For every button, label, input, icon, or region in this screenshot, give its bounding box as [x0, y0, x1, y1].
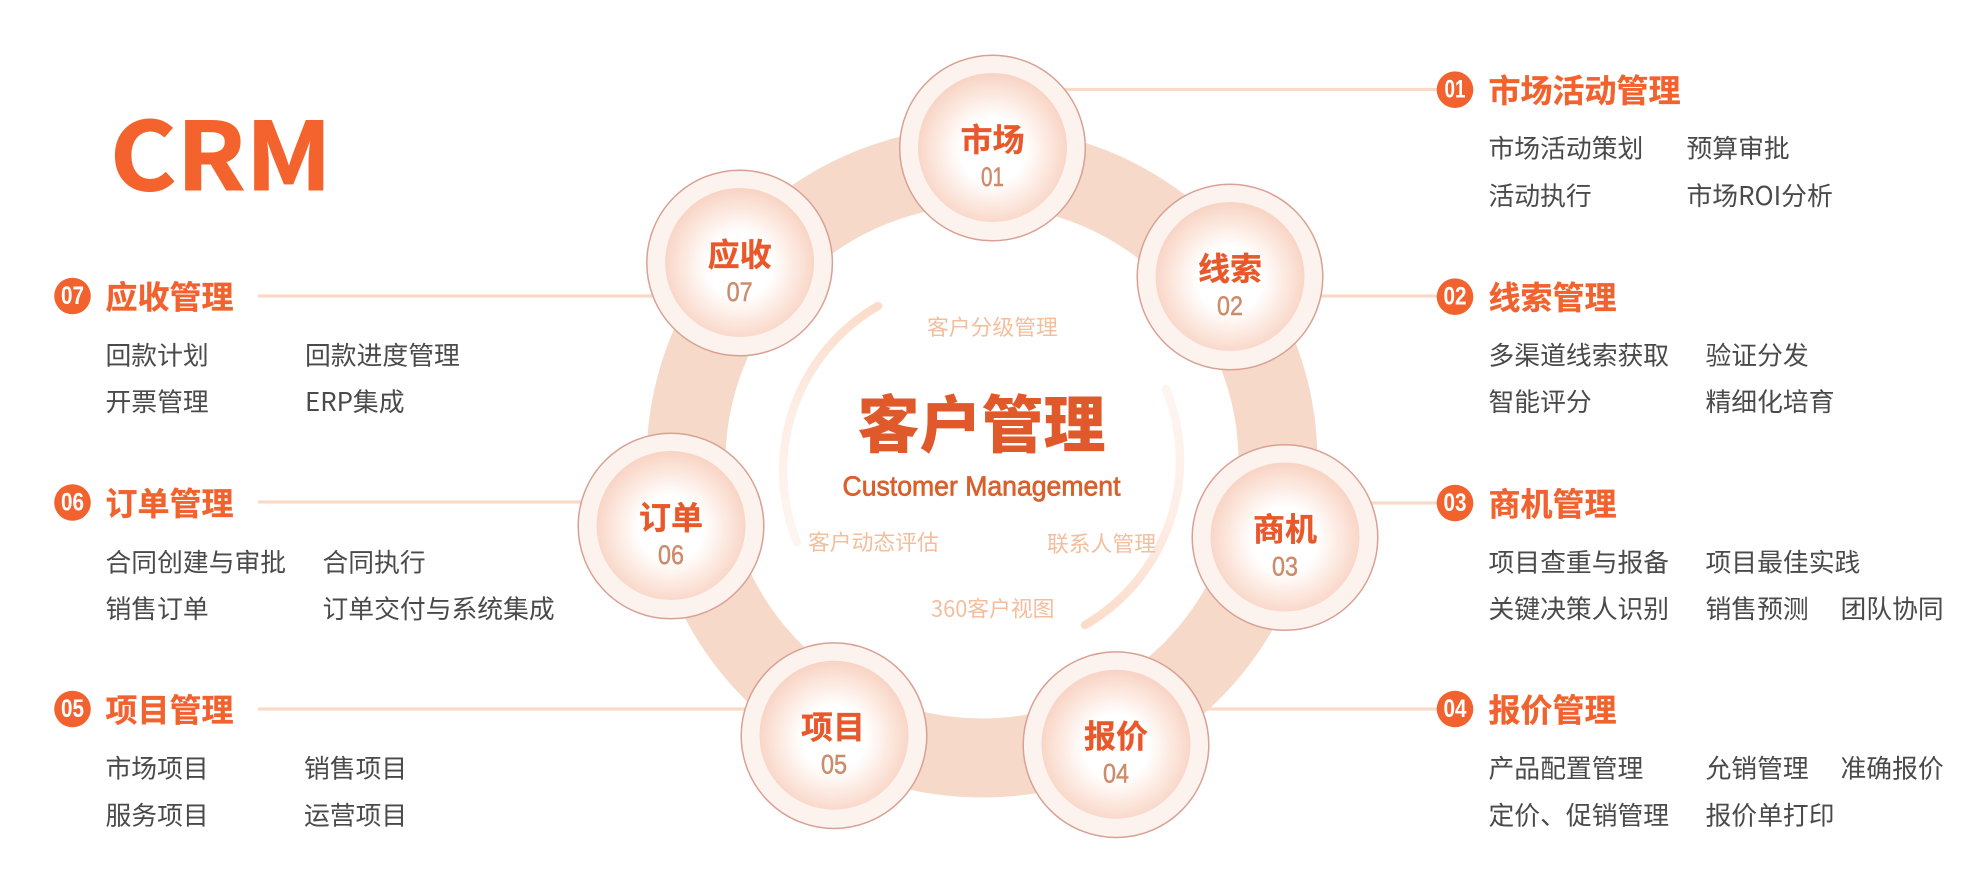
- node 05: 05: [821, 750, 847, 780]
- center hub: [808, 311, 1156, 624]
- inner arc: left: [783, 306, 878, 542]
- panel 05: project management: 运营项目: [304, 796, 407, 833]
- panel 04: quotation management: [1437, 686, 1944, 833]
- panel 06: order management: 合同执行: [322, 543, 426, 580]
- panel 02: leads management: 智能评分: [1488, 382, 1592, 419]
- panel 03: opportunity management: 团队协同: [1840, 589, 1944, 626]
- panel 02: leads management: 验证分发: [1706, 336, 1809, 373]
- node 04: 04: [1103, 759, 1129, 789]
- node 02: [1137, 184, 1323, 370]
- node 01: [900, 55, 1085, 241]
- node 02: 02: [1217, 291, 1243, 321]
- panel 01: market activity management: 预算审批: [1686, 129, 1790, 166]
- panel 05: project management: 服务项目: [106, 796, 209, 833]
- node 01: 市场: [960, 115, 1025, 161]
- label: 360 view: 360客户视图: [931, 592, 1054, 624]
- panel 02: leads management: 线索管理: [1488, 273, 1617, 319]
- panel 01: market activity management: 市场ROI分析: [1686, 176, 1833, 213]
- label: tiered management: 客户分级管理: [927, 311, 1058, 342]
- panel 05: project management: 项目管理: [106, 686, 234, 732]
- panel 01: market activity management: [1437, 66, 1833, 213]
- node 05: 项目: [801, 703, 865, 749]
- panel 07: receivables management: 回款进度管理: [305, 336, 460, 373]
- panel 01: market activity management: 01: [1444, 76, 1466, 104]
- panel 02: leads management: 多渠道线索获取: [1488, 336, 1669, 373]
- label: contacts: 联系人管理: [1047, 528, 1156, 558]
- inner arc: right: [1085, 389, 1180, 625]
- panel 04: quotation management: 04: [1444, 695, 1467, 723]
- panel 03: opportunity management: 商机管理: [1488, 480, 1617, 526]
- main ring: [686, 166, 1278, 758]
- node 07: 应收: [708, 230, 772, 276]
- panel 06: order management: [54, 479, 555, 626]
- center subtitle: Customer Management: [842, 470, 1121, 502]
- panel 03: opportunity management: 销售预测: [1706, 589, 1809, 626]
- panel 05: project management: 市场项目: [106, 749, 209, 786]
- panel 04: quotation management: 报价管理: [1488, 686, 1617, 732]
- panel 07: receivables management: ERP集成: [305, 382, 404, 419]
- node 06: [578, 433, 764, 619]
- panel 04: quotation management: 准确报价: [1840, 749, 1944, 786]
- panel 06: order management: 06: [61, 488, 84, 516]
- panel 01: market activity management: 活动执行: [1488, 176, 1592, 213]
- panel 06: order management: 销售订单: [106, 589, 209, 626]
- panel 05: project management: 05: [61, 695, 84, 723]
- panel 04: quotation management: 产品配置管理: [1488, 749, 1643, 786]
- panel 07: receivables management: 07: [61, 282, 84, 310]
- panel 01: market activity management: 市场活动管理: [1488, 66, 1681, 112]
- panel 07: receivables management: 应收管理: [106, 272, 234, 318]
- panel 04: quotation management: 允销管理: [1706, 749, 1809, 786]
- node 03: 商机: [1253, 504, 1317, 550]
- panel 07: receivables management: 开票管理: [106, 382, 209, 419]
- node 07: [647, 170, 832, 356]
- panel 03: opportunity management: 关键决策人识别: [1488, 589, 1669, 626]
- panel 06: order management: 订单管理: [106, 479, 234, 525]
- panel 03: opportunity management: 项目查重与报备: [1488, 543, 1669, 580]
- panel 02: leads management: 精细化培育: [1706, 382, 1834, 419]
- panel 05: project management: [54, 686, 407, 833]
- node 04: 报价: [1084, 712, 1148, 758]
- panel 03: opportunity management: 03: [1444, 489, 1466, 517]
- panel 04: quotation management: 报价单打印: [1706, 796, 1834, 833]
- node 06: 06: [658, 540, 684, 570]
- panel 07: receivables management: 回款计划: [106, 336, 209, 373]
- node 02: 线索: [1198, 244, 1262, 290]
- panel 06: order management: 订单交付与系统集成: [322, 589, 555, 626]
- node 03: [1192, 445, 1378, 630]
- node 06: 订单: [639, 493, 703, 539]
- panel 02: leads management: [1437, 273, 1834, 419]
- panel 01: market activity management: 市场活动策划: [1488, 129, 1643, 166]
- panel 03: opportunity management: 项目最佳实践: [1706, 543, 1860, 580]
- node 07: 07: [727, 277, 753, 307]
- panel 02: leads management: 02: [1444, 283, 1466, 311]
- panel 06: order management: 合同创建与审批: [106, 543, 286, 580]
- node 03: 03: [1272, 552, 1298, 582]
- panel 04: quotation management: 定价、促销管理: [1488, 796, 1669, 833]
- panel 07: receivables management: [54, 272, 460, 419]
- connector lines: [258, 90, 1440, 709]
- node 01: 01: [981, 162, 1004, 192]
- title: CRM: CRM: [110, 82, 332, 218]
- panel 03: opportunity management: [1437, 480, 1944, 626]
- node 05: [741, 643, 927, 828]
- center title: 客户管理: [857, 375, 1106, 465]
- label: dynamic assessment: 客户动态评估: [808, 526, 939, 557]
- panel 05: project management: 销售项目: [304, 749, 407, 786]
- node 04: [1023, 652, 1209, 838]
